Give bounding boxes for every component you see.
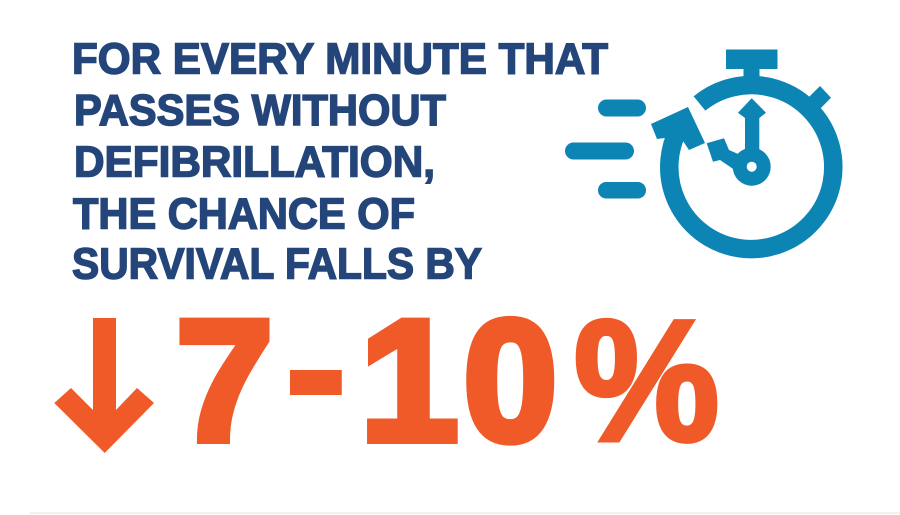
icon: down arrow: [54, 318, 154, 453]
heading text block: FOR EVERY MINUTE THAT: [72, 36, 608, 84]
big statistic 7-10%: [176, 247, 719, 482]
big statistic 7-10%: 7: [176, 284, 273, 477]
big statistic 7-10%: 0: [464, 285, 557, 477]
stopwatch hands: [707, 98, 771, 186]
speed lines: [565, 100, 646, 198]
stopwatch top button: [726, 50, 778, 84]
heading text block: [72, 36, 608, 288]
stopwatch ring with arrow: [651, 85, 833, 249]
big statistic 7-10%: -: [282, 247, 350, 482]
big statistic 7-10%: %: [574, 284, 719, 477]
icon: stopwatch with speed lines: [565, 50, 833, 249]
heading text block: THE CHANCE OF: [73, 190, 415, 238]
big statistic 7-10%: 1: [360, 284, 459, 476]
faint bottom rule: [30, 512, 900, 514]
heading text block: SURVIVAL FALLS BY: [72, 240, 482, 288]
heading text block: PASSES WITHOUT: [74, 87, 446, 135]
stopwatch side knob: [803, 86, 831, 114]
heading text block: DEFIBRILLATION,: [74, 138, 435, 186]
